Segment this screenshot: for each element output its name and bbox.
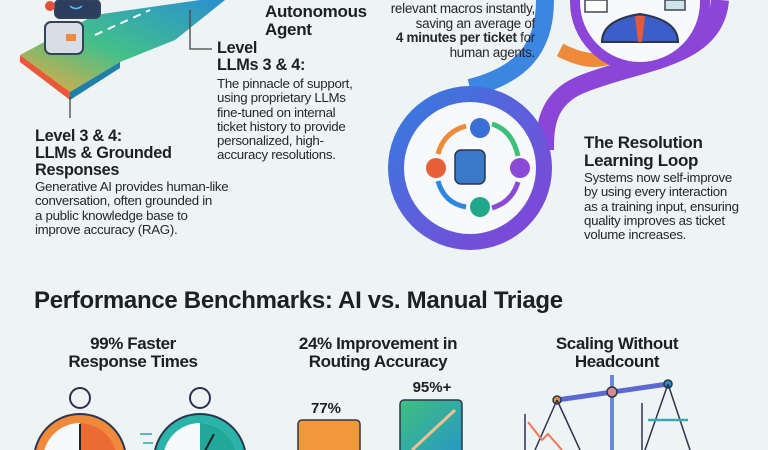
text block: level 3 & 4 grounded: improve accuracy (RAG). bbox=[35, 222, 177, 237]
text block: level LLMs 3 & 4 bbox=[217, 39, 352, 162]
text block: level LLMs 3 & 4: fine-tuned on internal bbox=[217, 105, 335, 120]
subheading: faster response bbox=[68, 334, 198, 371]
icon: agent circle bbox=[570, 0, 710, 72]
road platform bbox=[20, 0, 225, 100]
text block: macros bbox=[391, 1, 536, 60]
title: performance benchmarks: Performance Benchmarks: AI vs. Manual Triage bbox=[34, 287, 563, 314]
text block: resolution learning loop: volume increases. bbox=[584, 227, 686, 242]
subheading: scaling: Headcount bbox=[575, 352, 659, 371]
subheading: faster response: Response Times bbox=[68, 352, 198, 371]
subheading: faster response: 99% Faster bbox=[90, 334, 176, 353]
text block: level 3 & 4 grounded: Generative AI provides human-like bbox=[35, 179, 228, 194]
icon: scale bbox=[525, 375, 690, 450]
text block: level LLMs 3 & 4: accuracy resolutions. bbox=[217, 147, 336, 162]
text block: level LLMs 3 & 4: LLMs 3 & 4: bbox=[217, 56, 305, 74]
text block: level 3 & 4 grounded: Responses bbox=[35, 161, 119, 179]
subheading: routing accuracy bbox=[299, 334, 457, 371]
text block: resolution learning loop: quality improves as ticket bbox=[584, 213, 725, 228]
text block: level LLMs 3 & 4: ticket history to provide bbox=[217, 119, 345, 134]
icon: robot bbox=[45, 0, 100, 54]
subheading: routing accuracy: Routing Accuracy bbox=[309, 352, 447, 371]
text block: level LLMs 3 & 4: using proprietary LLMs bbox=[217, 90, 346, 105]
heading: autonomous agent: Agent bbox=[265, 20, 312, 39]
text block: level 3 & 4 grounded bbox=[35, 127, 228, 237]
bar chart: 95%+ bbox=[413, 379, 452, 396]
text block: macros: 4 minutes per ticket for bbox=[396, 30, 535, 45]
text block: macros: human agents. bbox=[450, 44, 535, 60]
text block: level 3 & 4 grounded: a public knowledge base to bbox=[35, 208, 188, 223]
text block: level 3 & 4 grounded: LLMs & Grounded bbox=[35, 144, 172, 162]
text block: macros: relevant macros instantly, bbox=[391, 1, 535, 16]
text block: level 3 & 4 grounded: conversation, often grounded in bbox=[35, 193, 212, 208]
icon: learning loop circle bbox=[388, 86, 552, 250]
connector lines bbox=[70, 10, 212, 118]
heading: autonomous agent bbox=[265, 2, 367, 39]
bar chart: 77% bbox=[311, 400, 341, 417]
subheading: routing accuracy: 24% Improvement in bbox=[299, 334, 457, 353]
text block: level LLMs 3 & 4: The pinnacle of support, bbox=[217, 76, 352, 91]
text block: resolution learning loop: The Resolution bbox=[584, 133, 703, 152]
text block: resolution learning loop bbox=[584, 133, 739, 242]
text block: level 3 & 4 grounded: Level 3 & 4: bbox=[35, 127, 122, 145]
subheading: scaling: Scaling Without bbox=[556, 334, 678, 353]
text block: resolution learning loop: by using every interaction bbox=[584, 184, 727, 199]
flow path bbox=[470, 0, 720, 150]
text block: resolution learning loop: Systems now self-improve bbox=[584, 170, 732, 185]
icon: stopwatches bbox=[34, 388, 246, 450]
text block: macros: saving an average of bbox=[416, 16, 535, 30]
subheading: scaling bbox=[556, 334, 678, 371]
text block: level LLMs 3 & 4: personalized, high- bbox=[217, 133, 324, 148]
heading: autonomous agent: Autonomous bbox=[265, 2, 367, 21]
bar chart bbox=[298, 379, 462, 450]
text block: level LLMs 3 & 4: Level bbox=[217, 39, 257, 57]
text block: resolution learning loop: as a training input, ensuring bbox=[584, 199, 739, 214]
text block: resolution learning loop: Learning Loop bbox=[584, 151, 698, 170]
